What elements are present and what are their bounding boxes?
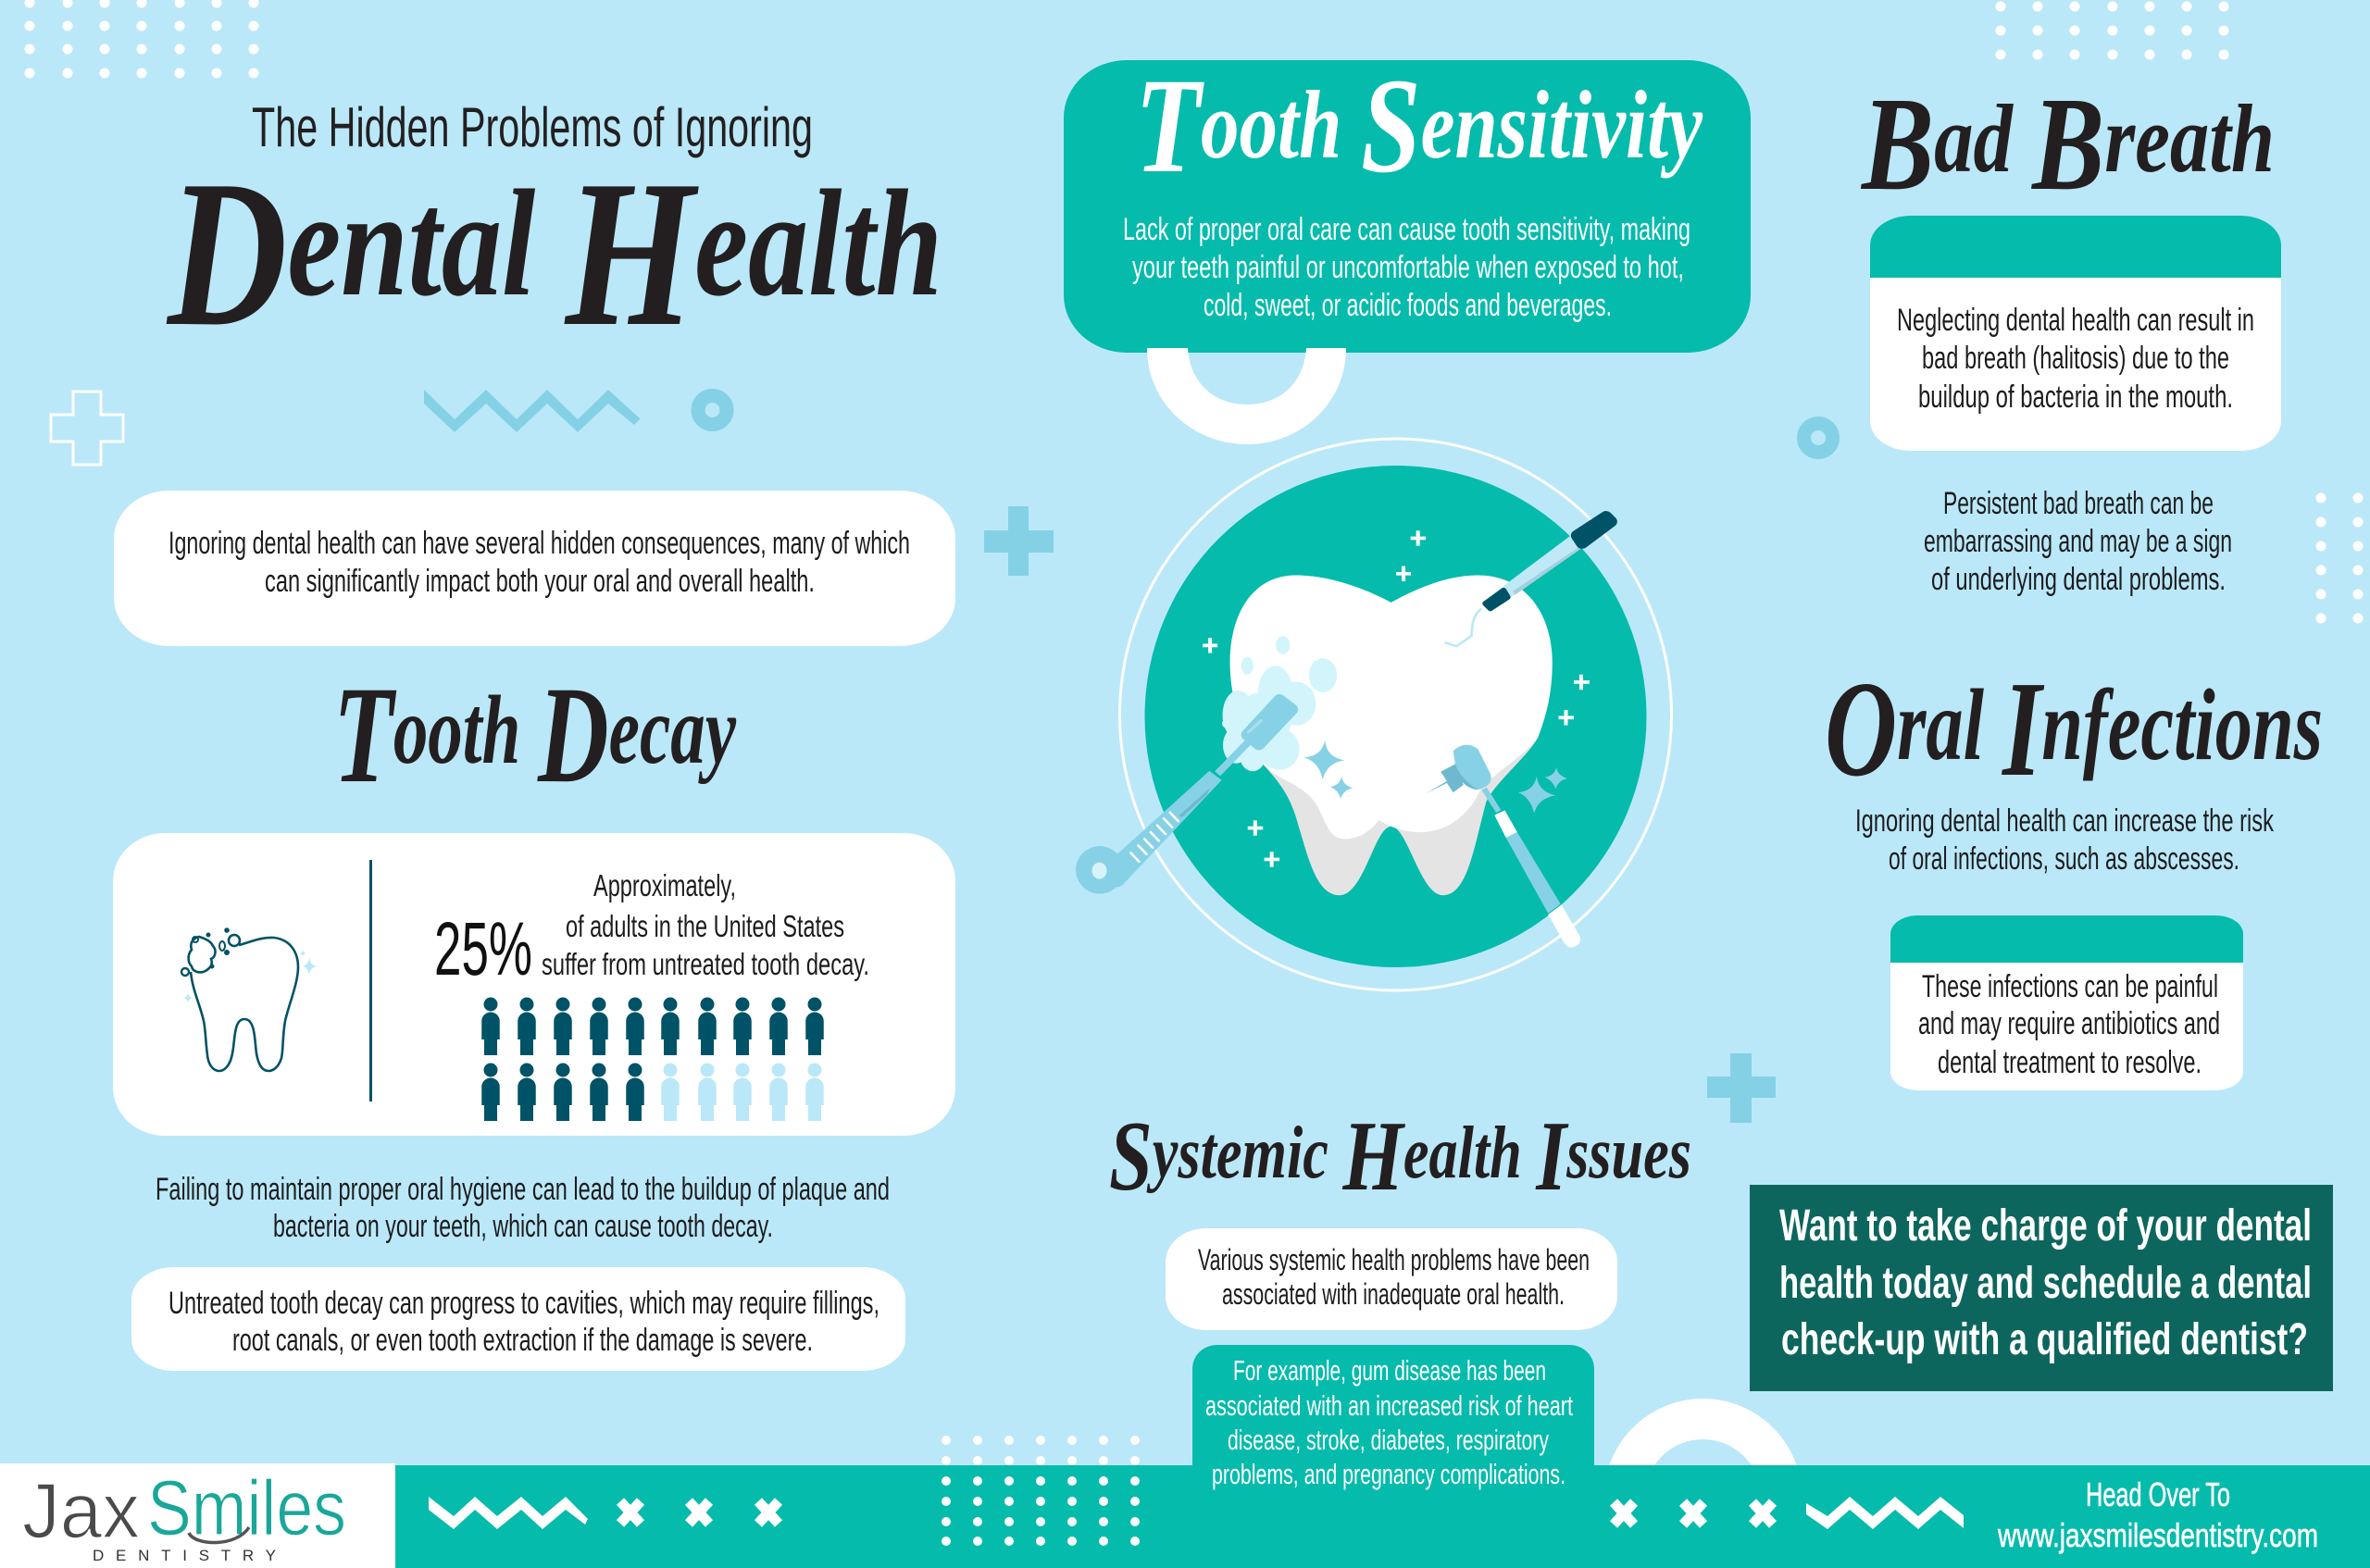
heading: systemic health issues: I	[1535, 1101, 1569, 1212]
panel: oral infections card: dental treatment to resolve.	[1938, 1045, 2202, 1080]
text: failing hygiene: bacteria on your teeth, which can cause tooth decay.	[273, 1209, 773, 1244]
icon: tooth outline with decay	[181, 927, 318, 1071]
panel: systemic teal card	[1192, 1345, 1594, 1466]
heading: systemic health issues: ssues	[1565, 1113, 1691, 1194]
footer call to visit website: Head Over To	[2086, 1475, 2230, 1513]
intro text: can significantly impact both your oral and overall health.	[265, 564, 815, 599]
heading: tooth decay: D	[537, 658, 609, 812]
footer band	[395, 1465, 2370, 1568]
foam	[1222, 636, 1337, 771]
footer call to visit website	[1997, 1475, 2318, 1554]
heading: tooth decay: ooth	[393, 676, 538, 784]
panel: oral infections card: These infections can be painful	[1922, 969, 2218, 1004]
heading: systemic health issues: H	[1342, 1101, 1405, 1212]
icons: footer crosses right	[1614, 1502, 1773, 1524]
illustration teal disc	[1144, 466, 1646, 967]
logo panel	[0, 1463, 395, 1568]
icon: blue zigzag	[424, 390, 640, 432]
text: systemic example: disease, stroke, diabetes, respiratory	[1228, 1424, 1549, 1456]
subtitle: The Hidden Problems of Ignoring	[252, 96, 813, 158]
icon: footer zigzag left	[429, 1497, 588, 1529]
logo wordmark	[22, 1464, 346, 1554]
sensitivity text: cold, sweet, or acidic foods and beverages.	[1204, 288, 1612, 323]
text: systemic example	[1205, 1354, 1573, 1490]
panel: tooth decay statistic	[113, 833, 955, 1136]
intro text: Ignoring dental health can have several hidden consequences, many of which	[168, 526, 910, 561]
main title: H	[564, 138, 699, 370]
heading: tooth decay: T	[333, 658, 397, 812]
decorative white half ring	[1147, 348, 1346, 444]
icon: outlined cross	[51, 392, 123, 465]
heading: systemic health issues: ealth	[1403, 1113, 1536, 1194]
panel: bad breath card: buildup of bacteria in the mouth.	[1918, 380, 2233, 415]
panel: untreated decay: root canals, or even tooth extraction if the damage is severe.	[232, 1323, 813, 1358]
central illustration: tooth and dental tools	[1076, 439, 1672, 990]
heading: oral infections: I	[2002, 653, 2044, 805]
stat caption: suffer from untreated tooth decay.	[542, 947, 869, 981]
tool: toothbrush mirror	[1076, 700, 1292, 894]
pictogram: 15 of 20 people	[481, 998, 824, 1121]
heading: tooth sensitivity: ensitivity	[1421, 70, 1703, 179]
icon: footer zigzag right	[1806, 1497, 1964, 1529]
text: systemic example: associated with an increased risk of heart	[1205, 1389, 1573, 1422]
sensitivity text: Lack of proper oral care can cause tooth sensitivity, making	[1123, 212, 1690, 247]
heading: bad breath: B	[2030, 70, 2104, 218]
heading: oral infections: O	[1825, 653, 1897, 805]
small plus signs	[1203, 530, 1590, 867]
text: persistent bad breath: Persistent bad breath can be	[1943, 486, 2214, 521]
sparkles	[1304, 740, 1567, 814]
panel: untreated decay: Untreated tooth decay can progress to cavities, which may require fillings,	[168, 1286, 879, 1321]
decorative white ring behind footer	[1624, 1419, 1781, 1568]
sensitivity text: your teeth painful or uncomfortable when exposed to hot,	[1132, 250, 1684, 285]
icon: blue plus lower right	[1707, 1053, 1776, 1123]
logo wordmark: Smiles	[147, 1464, 346, 1551]
icons: footer crosses left	[620, 1501, 779, 1524]
illustration ring	[1120, 439, 1672, 990]
divider	[369, 860, 372, 1101]
panel: intro	[114, 491, 955, 646]
panel: tooth sensitivity	[1064, 50, 1751, 353]
logo wordmark: Jax	[22, 1467, 140, 1554]
tooth shape	[1230, 575, 1553, 895]
main title: ental	[287, 158, 566, 328]
icon: blue plus	[984, 506, 1054, 576]
icon: blue ring	[698, 396, 727, 424]
text: persistent bad breath: embarrassing and may be a sign	[1924, 524, 2232, 559]
panel: bad breath card	[1870, 216, 2281, 451]
intro text	[168, 526, 910, 599]
panel: systemic white card: Various systemic health problems have been	[1198, 1243, 1590, 1276]
icon: blue ring right	[1803, 424, 1833, 452]
decorative dots: top left	[30, 3, 254, 73]
stat caption: of adults in the United States	[566, 909, 844, 943]
text: persistent bad breath: of underlying dental problems.	[1931, 562, 2226, 597]
decorative dots: top right	[2001, 6, 2224, 55]
panel: systemic white card	[1166, 1228, 1617, 1330]
stat caption: Approximately,	[593, 868, 736, 902]
heading: tooth sensitivity: S	[1361, 50, 1421, 201]
text: oral infections	[1855, 803, 2275, 877]
panel: oral infections card: and may require antibiotics and	[1918, 1006, 2220, 1041]
tool: scaler	[1445, 516, 1611, 646]
logo tagline: DENTISTRY	[93, 1547, 276, 1564]
panel: oral infections card	[1890, 915, 2243, 1090]
heading: bad breath: B	[1860, 70, 1934, 218]
sensitivity text	[1123, 212, 1690, 323]
panel: systemic white card: associated with inadequate oral health.	[1222, 1277, 1565, 1311]
text: failing hygiene	[156, 1172, 890, 1244]
panel: untreated decay	[131, 1267, 905, 1371]
text: persistent bad breath	[1924, 486, 2232, 597]
heading: bad breath: ad	[1934, 84, 2032, 193]
stat 25%: 25%	[434, 907, 532, 991]
heading: systemic health issues: S	[1109, 1101, 1153, 1212]
heading: systemic health issues: ystemic	[1146, 1113, 1342, 1194]
text: failing hygiene: Failing to maintain proper oral hygiene can lead to the buildup of plaque and	[156, 1172, 890, 1207]
text: systemic example: For example, gum disease has been	[1233, 1354, 1546, 1387]
heading: tooth sensitivity: T	[1135, 50, 1204, 201]
text: systemic example: problems, and pregnancy complications.	[1212, 1458, 1565, 1490]
heading: bad breath: reath	[2104, 84, 2275, 193]
main title: ealth	[694, 158, 942, 328]
panel: call to action	[1750, 1185, 2333, 1391]
heading: oral infections: ral	[1897, 668, 2002, 781]
stat caption	[542, 868, 869, 981]
tool: polisher	[1427, 745, 1580, 948]
heading: tooth decay: ecay	[609, 676, 737, 784]
decorative dots: footer	[946, 1440, 1135, 1541]
heading: tooth sensitivity: ooth	[1201, 70, 1361, 179]
panel: bad breath card: bad breath (halitosis) due to the	[1922, 341, 2229, 376]
decorative dots: right edge	[2321, 498, 2358, 618]
main title: D	[166, 138, 287, 370]
